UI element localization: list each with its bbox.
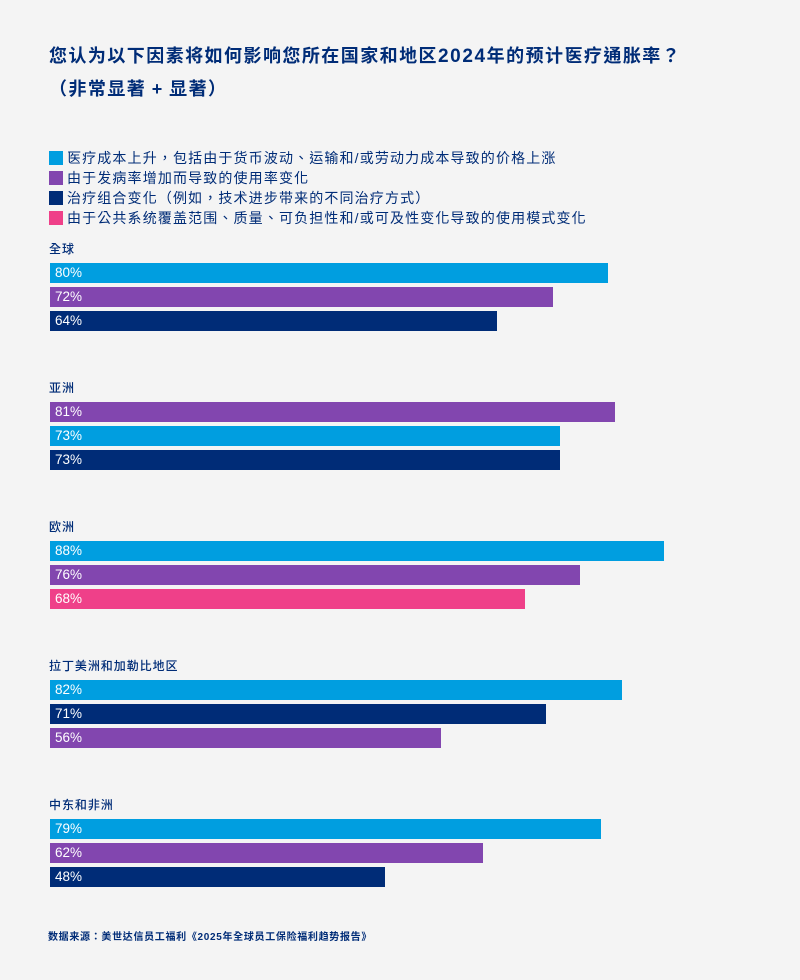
bar: 71%: 71% [55,706,82,721]
bar: 48%: 48% [55,869,82,884]
panel: asia [49,381,615,470]
bar: 73%: 73% [55,452,82,467]
bar: 82% [50,680,622,700]
bar: 76%: 76% [55,567,82,582]
title [49,46,681,99]
heading: latin america: 拉丁美洲和加勒比地区 [49,659,179,673]
bar: 68% [50,589,525,609]
bar: 79% [50,819,601,839]
bar: 81%: 81% [55,404,82,419]
bar: 81% [50,402,615,422]
legend item: public coverage: 由于公共系统覆盖范围、质量、可负担性和/或可及性变化导致的使用模式变化 [67,210,587,226]
panel: europe [49,520,664,609]
legend item: utilization: 由于发病率增加而导致的使用率变化 [67,170,309,186]
bar: 88% [50,541,664,561]
bar: 88%: 88% [55,543,82,558]
source note: 数据来源：美世达信员工福利《2025年全球员工保险福利趋势报告》 [48,932,372,943]
legend [49,150,587,226]
bar: 48% [50,867,385,887]
bar: 56%: 56% [55,730,82,745]
bar: 73% [50,450,560,470]
legend item: treatment mix: 治疗组合变化（例如，技术进步带来的不同治疗方式） [67,190,430,206]
bar: 64% [50,311,497,331]
panel: latin america and caribbean [49,659,622,748]
bar: 72%: 72% [55,289,82,304]
title: 您认为以下因素将如何影响您所在国家和地区2024年的预计医疗通胀率？ [49,46,681,67]
bar: 68%: 68% [55,591,82,606]
bar: 62% [50,843,483,863]
bar: 73%: 73% [55,428,82,443]
bar: 64%: 64% [55,313,82,328]
bar: 56% [50,728,441,748]
bar: 73% [50,426,560,446]
title: （非常显著 + 显著） [49,79,227,99]
bar: 72% [50,287,553,307]
bar: 82%: 82% [55,682,82,697]
panel: middle east and africa [49,798,601,887]
bar: 71% [50,704,546,724]
legend item: cost: 医疗成本上升，包括由于货币波动、运输和/或劳动力成本导致的价格上涨 [67,150,557,166]
bar: 79%: 79% [55,821,82,836]
bar: 80% [50,263,608,283]
bar: 76% [50,565,580,585]
heading: europe: 欧洲 [49,520,75,534]
bar: 80%: 80% [55,265,82,280]
heading: middle east and africa: 中东和非洲 [49,798,114,812]
heading: global: 全球 [49,242,75,256]
bar: 62%: 62% [55,845,82,860]
panel: global [49,242,608,331]
heading: asia: 亚洲 [49,381,75,395]
